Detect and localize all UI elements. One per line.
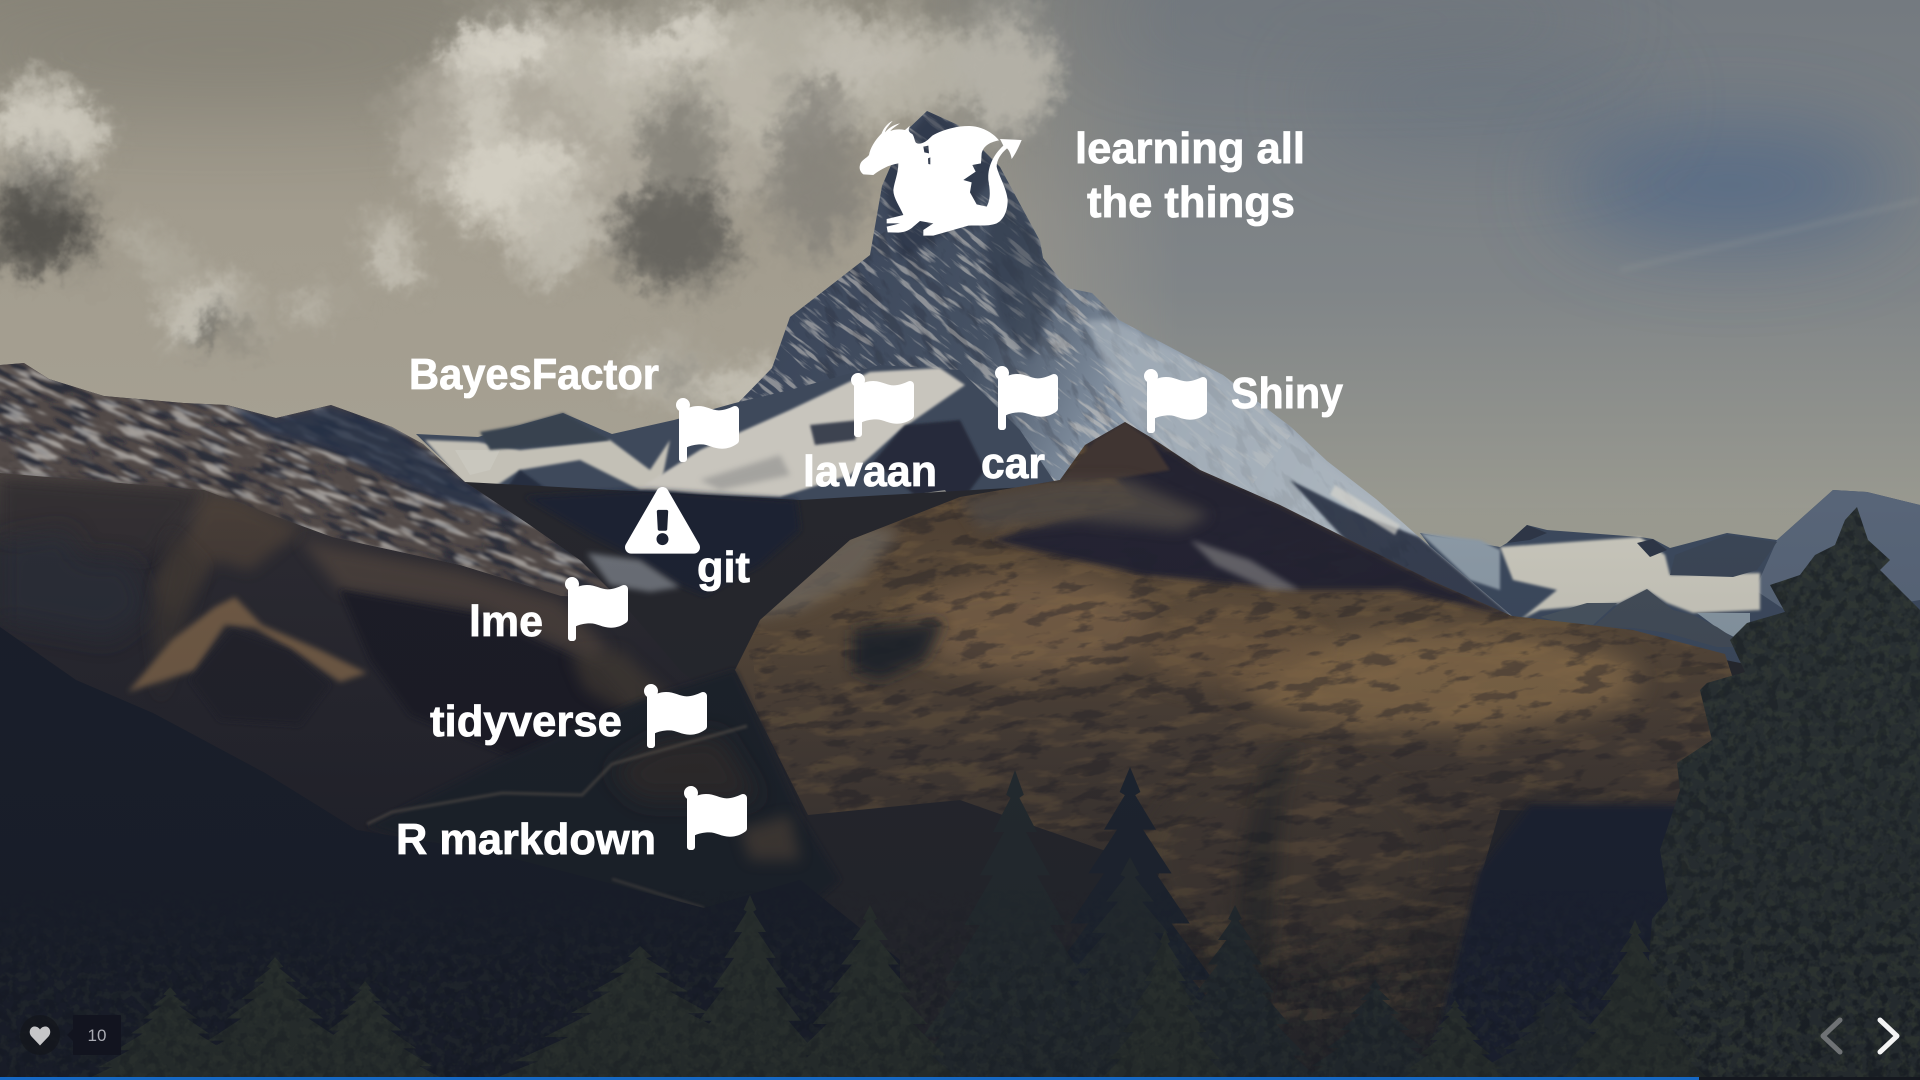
- icon: R markdown flag: [684, 786, 747, 850]
- matterhorn peak: [738, 111, 1512, 616]
- label: git: git: [697, 543, 750, 592]
- icon: git warning triangle: [625, 487, 700, 554]
- icon: tidyverse flag: [644, 684, 707, 748]
- icon: dragon: [860, 121, 1022, 236]
- arrow: previous slide: [1823, 1020, 1840, 1052]
- shaded forest face: [1440, 802, 1676, 1024]
- label: BayesFactor: BayesFactor: [409, 350, 659, 399]
- large right conifer: [1640, 500, 1920, 1080]
- label: Shiny: Shiny: [1231, 369, 1343, 418]
- arrow: next slide: [1880, 1020, 1897, 1052]
- icon: lavaan flag: [851, 373, 914, 437]
- sky: [0, 0, 1920, 548]
- central brown mountain: [735, 422, 1732, 1021]
- left forest slope: [0, 627, 900, 1080]
- label: lavaan: lavaan: [803, 447, 937, 496]
- far right mountains: [1420, 490, 1920, 664]
- slide counter: [67, 1015, 121, 1055]
- dark image overlay: [102, 602, 1920, 1077]
- icon: BayesFactor flag: [676, 398, 739, 462]
- base of the valley: [465, 482, 1745, 1057]
- icon: like heart button: [20, 1015, 60, 1055]
- label: lme: lme: [469, 597, 543, 646]
- dark valley: [525, 490, 800, 595]
- label: car: car: [981, 439, 1045, 488]
- icon: car flag: [995, 366, 1058, 430]
- progress bar: [0, 1077, 1920, 1080]
- foreground conifers: [0, 500, 1920, 1080]
- valley rubble: [587, 553, 680, 592]
- slide counter: 10: [88, 1026, 106, 1045]
- label: R markdown: R markdown: [396, 815, 656, 864]
- clouds: [0, 0, 1046, 412]
- left mountain range: [0, 363, 664, 753]
- label: tidyverse: tidyverse: [430, 697, 622, 746]
- heading: learning all the things: learning all: [1075, 124, 1305, 173]
- lower slope and trail: [366, 668, 836, 908]
- heading: learning all the things: [1075, 124, 1305, 227]
- icon: lme flag: [565, 577, 628, 641]
- snowy middle ridges: [416, 365, 1054, 500]
- icon: Shiny flag: [1144, 369, 1207, 433]
- heading: learning all the things: the things: [1087, 178, 1295, 227]
